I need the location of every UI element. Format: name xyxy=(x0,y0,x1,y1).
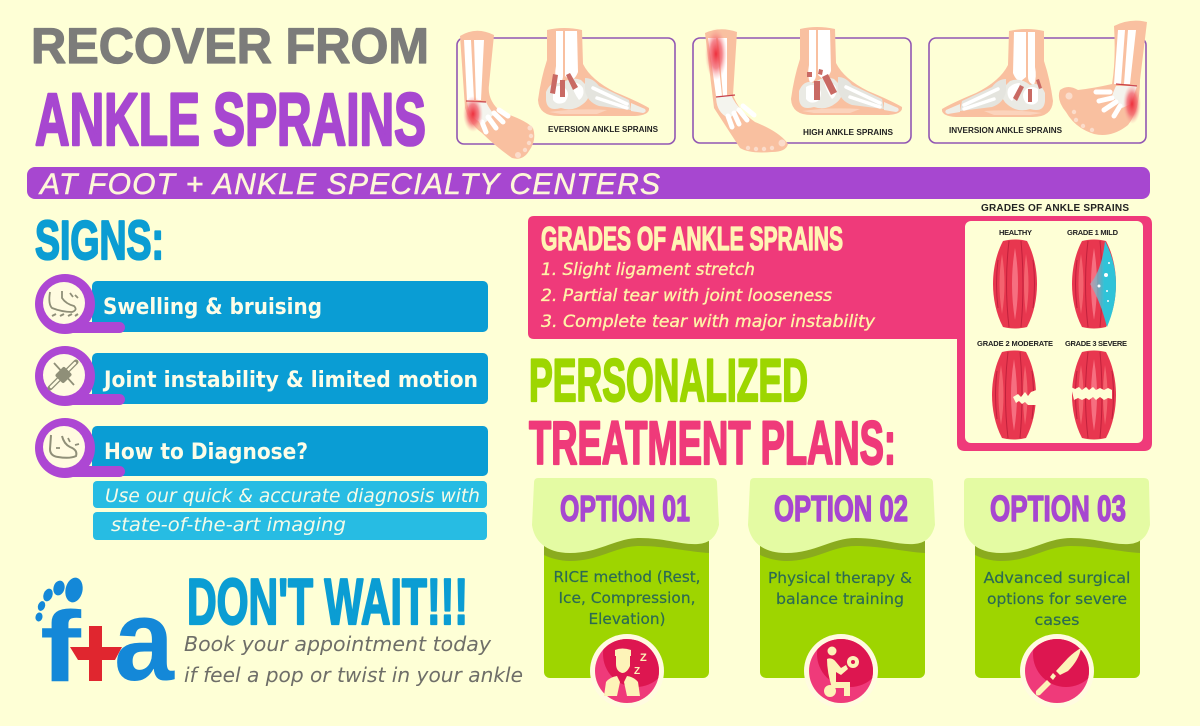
icon: resting person: Z xyxy=(640,652,647,664)
booking line one: Book your appointment today xyxy=(184,632,492,656)
muscle: grade 2 moderate: GRADE 2 MODERATE xyxy=(977,339,1053,348)
sign: how to diagnose xyxy=(35,418,488,478)
icon: resting person: Z xyxy=(634,666,640,677)
option text: RICE method (Rest, xyxy=(554,568,700,586)
sign text: Swelling & bruising xyxy=(103,295,322,320)
card: option 03 xyxy=(964,478,1150,708)
muscle: grade 1 mild xyxy=(1067,228,1119,328)
label: HIGH ANKLE SPRAINS xyxy=(803,128,894,137)
heading: personalized: PERSONALIZED xyxy=(529,347,808,414)
muscle: grade 2 moderate xyxy=(977,339,1053,440)
foot side view xyxy=(538,28,649,116)
ligaments xyxy=(550,73,578,97)
title line: ankle sprains: ANKLE SPRAINS xyxy=(35,78,426,161)
icon: joint xyxy=(35,346,125,406)
label: INVERSION ANKLE SPRAINS xyxy=(949,126,1063,135)
sign text: How to Diagnose? xyxy=(104,440,308,465)
sign: joint instability xyxy=(35,346,488,406)
option text: Elevation) xyxy=(588,610,666,628)
heading: don't wait: DON'T WAIT!!! xyxy=(187,565,468,638)
grade list: 1. Slight ligament stretch xyxy=(541,260,755,280)
pink background xyxy=(528,216,1152,451)
icon: swollen foot xyxy=(35,274,125,334)
sign: swelling xyxy=(35,274,488,334)
title line: recover from: RECOVER FROM xyxy=(31,18,429,74)
label: EVERSION ANKLE SPRAINS xyxy=(548,125,659,134)
muscle: grade 1 mild: GRADE 1 MILD xyxy=(1067,228,1119,237)
grade list: 3. Complete tear with major instability xyxy=(541,312,876,332)
muscle: grade 3 severe: GRADE 3 SEVERE xyxy=(1065,339,1127,348)
muscle: grade 3 severe xyxy=(1065,339,1127,440)
grade list xyxy=(541,260,876,332)
foot front view xyxy=(1059,21,1147,135)
footprint toes xyxy=(34,576,85,622)
panel: eversion ankle sprain xyxy=(457,28,675,159)
panel: inversion ankle sprain xyxy=(929,21,1147,143)
note line one: Use our quick & accurate diagnosis with xyxy=(105,485,480,507)
card: option 02 xyxy=(748,478,935,708)
sign text: Joint instability & limited motion xyxy=(102,368,478,393)
grade list: 2. Partial tear with joint looseness xyxy=(541,286,832,306)
foot side view xyxy=(942,29,1053,117)
option label: OPTION 02 xyxy=(774,488,908,529)
option text: cases xyxy=(1034,611,1080,629)
logo: f+a xyxy=(34,575,175,705)
option text xyxy=(554,568,700,628)
icon: therapy xyxy=(804,634,878,708)
option label: OPTION 01 xyxy=(560,488,690,529)
panel heading: GRADES OF ANKLE SPRAINS xyxy=(541,220,843,257)
option text: Advanced surgical xyxy=(984,569,1130,587)
icon: foot pain xyxy=(35,418,125,478)
card: option 01 xyxy=(532,478,719,708)
foot side view xyxy=(791,27,902,115)
letter f: f xyxy=(40,591,82,703)
banner xyxy=(27,167,1150,201)
panel: high ankle sprain xyxy=(693,27,911,152)
icon: scalpel xyxy=(1020,634,1094,708)
ligaments xyxy=(1013,79,1042,102)
booking line two: if feel a pop or twist in your ankle xyxy=(184,663,523,687)
red cross xyxy=(70,626,122,681)
title xyxy=(31,18,429,161)
diagnosis note xyxy=(93,481,487,540)
option text: Physical therapy & xyxy=(768,569,912,587)
foot front view xyxy=(460,31,534,159)
panel: grades of ankle sprains xyxy=(528,216,1152,451)
option text: options for severe xyxy=(987,590,1127,608)
option label: OPTION 03 xyxy=(990,488,1126,529)
option text xyxy=(768,569,912,608)
call to action xyxy=(184,565,523,687)
icon: resting person xyxy=(590,634,664,708)
option text: Ice, Compression, xyxy=(558,589,696,607)
option text: balance training xyxy=(776,590,904,608)
heading: treatment plans: TREATMENT PLANS: xyxy=(529,409,896,477)
option text xyxy=(984,569,1130,629)
letter a: a xyxy=(114,575,175,705)
note line two: state-of-the-art imaging xyxy=(111,514,346,536)
muscle: healthy: HEALTHY xyxy=(999,228,1032,237)
banner text: AT FOOT + ANKLE SPECIALTY CENTERS xyxy=(38,168,660,201)
foot front view xyxy=(705,28,788,152)
ligaments xyxy=(807,69,837,100)
muscle: healthy xyxy=(993,228,1037,328)
heading: signs: SIGNS: xyxy=(35,209,164,271)
diagram title: GRADES OF ANKLE SPRAINS xyxy=(981,203,1129,214)
